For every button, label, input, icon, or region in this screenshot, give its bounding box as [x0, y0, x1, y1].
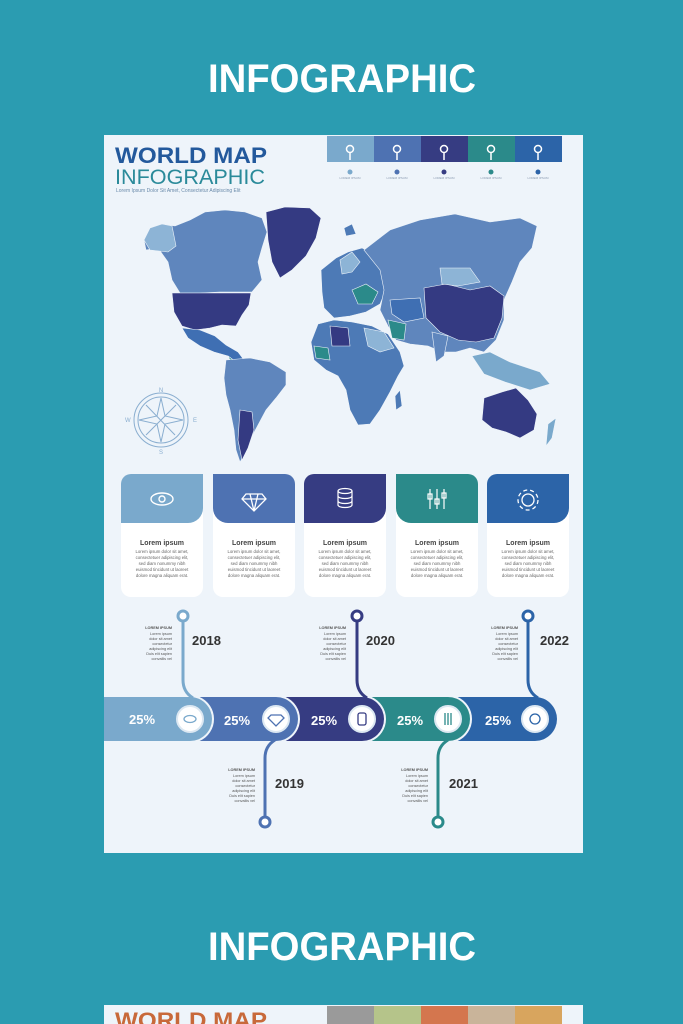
icon circles [177, 706, 548, 732]
timeline notes: adipiscing elit [405, 789, 429, 793]
card 4: sed diam nonummy nibh [414, 561, 461, 566]
card 1: dolore magna aliquam erat. [136, 573, 188, 578]
timeline notes: LOREM IPSUM [319, 626, 346, 630]
card 4 [396, 474, 478, 597]
timeline notes: LOREM IPSUM [491, 626, 518, 630]
timeline notes: dolor sit amet [405, 779, 429, 783]
card 3 [304, 474, 386, 597]
poster heading: WORLD MAP [115, 143, 267, 168]
legend strip [327, 136, 562, 180]
poster heading: INFOGRAPHIC [115, 166, 265, 189]
timeline notes: Duis elit sapien [229, 794, 255, 798]
poster heading: Lorem Ipsum Dolor Sit Amet, Consectetur Adipiscing Elit [116, 188, 241, 194]
timeline notes: Duis elit sapien [320, 652, 346, 656]
card 3: euismod tincidunt ut laoreet [319, 567, 372, 572]
compass: W [125, 418, 131, 424]
percentage labels: 25% [485, 713, 511, 728]
timeline notes: convallis vel [326, 657, 346, 661]
compass: N [159, 388, 163, 394]
years: 2018 [192, 633, 221, 648]
timeline notes: Duis elit sapien [146, 652, 172, 656]
timeline notes: consectetur [326, 642, 347, 646]
card 5: Lorem ipsum dolor sit amet, [501, 549, 555, 554]
years: 2019 [275, 776, 304, 791]
second title: INFOGRAPHIC [208, 925, 476, 969]
percentage labels: 25% [311, 713, 337, 728]
legend strip: LOREM IPSUM [339, 176, 361, 180]
timeline notes: convallis vel [152, 657, 172, 661]
card 2: sed diam nonummy nibh [231, 561, 278, 566]
title: INFOGRAPHIC [208, 57, 476, 101]
card 2: Lorem ipsum dolor sit amet, [227, 549, 281, 554]
timeline notes: Lorem ipsum [496, 632, 518, 636]
timeline notes: dolor sit amet [495, 637, 519, 641]
timeline notes: LOREM IPSUM [401, 768, 428, 772]
card 1: consectetuer adipiscing elit, [136, 555, 188, 560]
card 4: Lorem ipsum dolor sit amet, [410, 549, 464, 554]
percentage labels: 25% [397, 713, 423, 728]
card 5: euismod tincidunt ut laoreet [502, 567, 555, 572]
percentage labels: 25% [129, 712, 155, 727]
card 3: Lorem ipsum dolor sit amet, [318, 549, 372, 554]
timeline notes: Duis elit sapien [492, 652, 518, 656]
card 2: euismod tincidunt ut laoreet [228, 567, 281, 572]
card 3: sed diam nonummy nibh [322, 561, 369, 566]
timeline notes: Duis elit sapien [402, 794, 428, 798]
timeline notes: consectetur [498, 642, 519, 646]
years: 2021 [449, 776, 478, 791]
timeline notes: consectetur [152, 642, 173, 646]
card 2 [213, 474, 295, 597]
card 1: euismod tincidunt ut laoreet [136, 567, 189, 572]
timeline notes: Lorem ipsum [324, 632, 346, 636]
poster panel [104, 135, 583, 853]
card 5: dolore magna aliquam erat. [502, 573, 554, 578]
card 2: consectetuer adipiscing elit, [228, 555, 280, 560]
card 1: Lorem ipsum dolor sit amet, [135, 549, 189, 554]
legend strip: LOREM IPSUM [433, 176, 455, 180]
timeline notes: adipiscing elit [149, 647, 173, 651]
legend strip: LOREM IPSUM [527, 176, 549, 180]
timeline notes: Lorem ipsum [233, 774, 255, 778]
cards row [121, 474, 569, 597]
timeline notes: Lorem ipsum [150, 632, 172, 636]
timeline notes [145, 626, 519, 803]
card 5 [487, 474, 569, 597]
timeline notes: dolor sit amet [323, 637, 347, 641]
timeline notes: adipiscing elit [323, 647, 347, 651]
compass: E [193, 418, 197, 424]
compass [125, 388, 197, 456]
card 4: euismod tincidunt ut laoreet [411, 567, 464, 572]
card 5: sed diam nonummy nibh [505, 561, 552, 566]
timeline notes: convallis vel [408, 799, 428, 803]
years [192, 633, 569, 791]
timeline notes: consectetur [235, 784, 256, 788]
legend strip: LOREM IPSUM [480, 176, 502, 180]
percentage labels [129, 712, 511, 728]
years: 2020 [366, 633, 395, 648]
card 1 [121, 474, 203, 597]
poster heading [115, 143, 267, 194]
timeline notes: convallis vel [235, 799, 255, 803]
connector lines [183, 620, 538, 818]
card 1: sed diam nonummy nibh [139, 561, 186, 566]
timeline notes: LOREM IPSUM [145, 626, 172, 630]
card 4: consectetuer adipiscing elit, [411, 555, 463, 560]
timeline notes: Lorem ipsum [406, 774, 428, 778]
timeline notes: dolor sit amet [232, 779, 256, 783]
legend strip: LOREM IPSUM [386, 176, 408, 180]
world map [144, 207, 556, 462]
timeline [104, 611, 569, 827]
card 3: dolore magna aliquam erat. [319, 573, 371, 578]
second poster preview [104, 1005, 583, 1024]
years: 2022 [540, 633, 569, 648]
compass: S [159, 450, 163, 456]
bar segments [104, 697, 212, 741]
timeline notes: adipiscing elit [495, 647, 519, 651]
timeline notes: dolor sit amet [149, 637, 173, 641]
card 2: Lorem ipsum [232, 540, 276, 547]
card 3: Lorem ipsum [323, 540, 367, 547]
card 2: dolore magna aliquam erat. [228, 573, 280, 578]
card 1: Lorem ipsum [140, 540, 184, 547]
timeline notes: adipiscing elit [232, 789, 256, 793]
timeline notes: LOREM IPSUM [228, 768, 255, 772]
card 5: Lorem ipsum [506, 540, 550, 547]
timeline notes: convallis vel [498, 657, 518, 661]
timeline notes: consectetur [408, 784, 429, 788]
card 4: Lorem ipsum [415, 540, 459, 547]
card 4: dolore magna aliquam erat. [411, 573, 463, 578]
card 5: consectetuer adipiscing elit, [502, 555, 554, 560]
card 3: consectetuer adipiscing elit, [319, 555, 371, 560]
percentage labels: 25% [224, 713, 250, 728]
